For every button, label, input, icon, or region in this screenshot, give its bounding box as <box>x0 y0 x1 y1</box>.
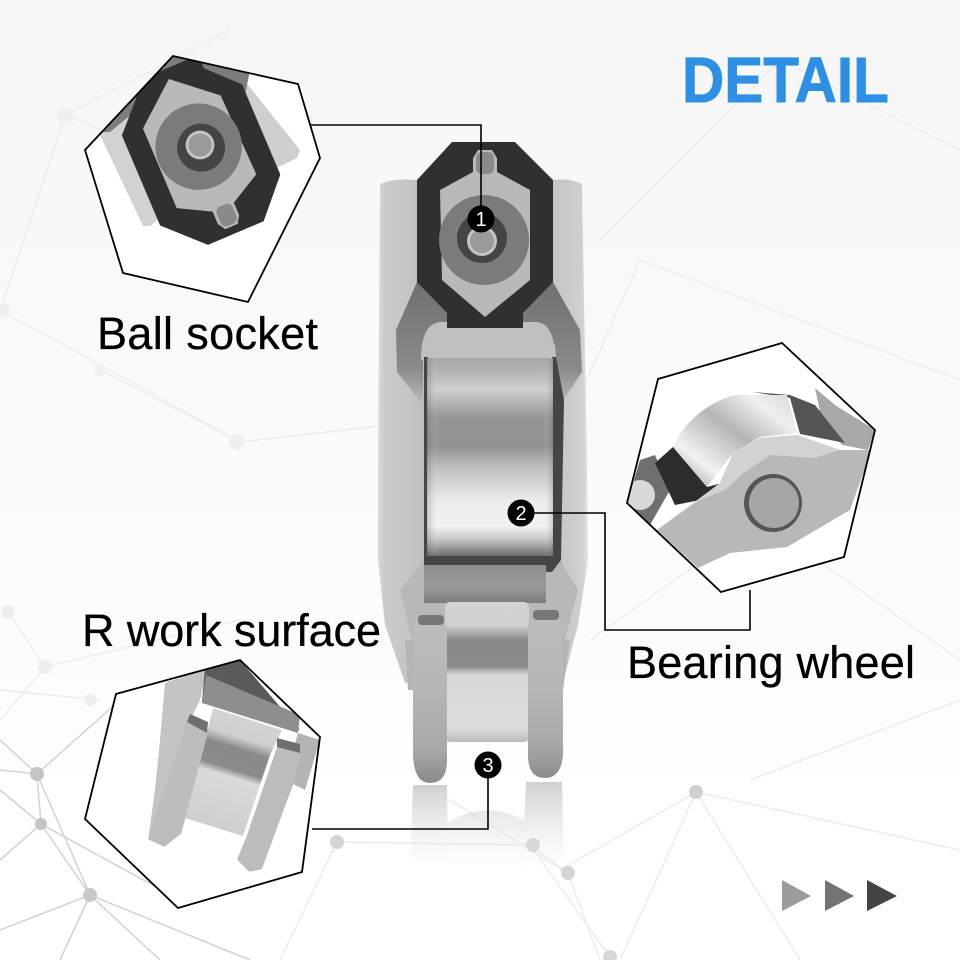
network nodes <box>0 107 703 960</box>
callout: bearing wheel <box>508 343 915 688</box>
number badge 3 <box>474 752 502 778</box>
lower body shade <box>400 560 578 640</box>
rocker arm product <box>378 142 588 783</box>
hexagon detail <box>85 660 320 908</box>
roller well <box>424 357 564 572</box>
hexagon detail <box>625 343 875 592</box>
roller housing <box>421 322 555 360</box>
arrows <box>782 880 897 911</box>
callout: ball socket <box>85 44 494 359</box>
number badge 2: 2 <box>515 503 527 525</box>
label: bearing wheel: Bearing wheel <box>627 637 915 688</box>
leader line <box>310 125 481 218</box>
shoulder shadow <box>396 282 582 405</box>
product reflection <box>410 782 564 868</box>
number badge 1 <box>468 206 494 232</box>
hexagon detail <box>85 44 320 302</box>
label: R work surface: R work surface <box>82 605 381 656</box>
callout: R work surface <box>82 605 502 908</box>
lower lugs and cylinder <box>405 602 570 783</box>
arm body <box>378 180 588 683</box>
leader line <box>521 513 750 630</box>
title: DETAIL <box>682 44 889 117</box>
number badge 2 <box>508 500 534 526</box>
socket insert <box>417 142 553 328</box>
roller <box>427 358 553 556</box>
label: ball socket: Ball socket <box>97 308 318 359</box>
number badge 1: 1 <box>475 209 487 231</box>
leader line <box>312 765 488 829</box>
lower block <box>424 565 546 603</box>
number badge 3: 3 <box>482 755 494 777</box>
